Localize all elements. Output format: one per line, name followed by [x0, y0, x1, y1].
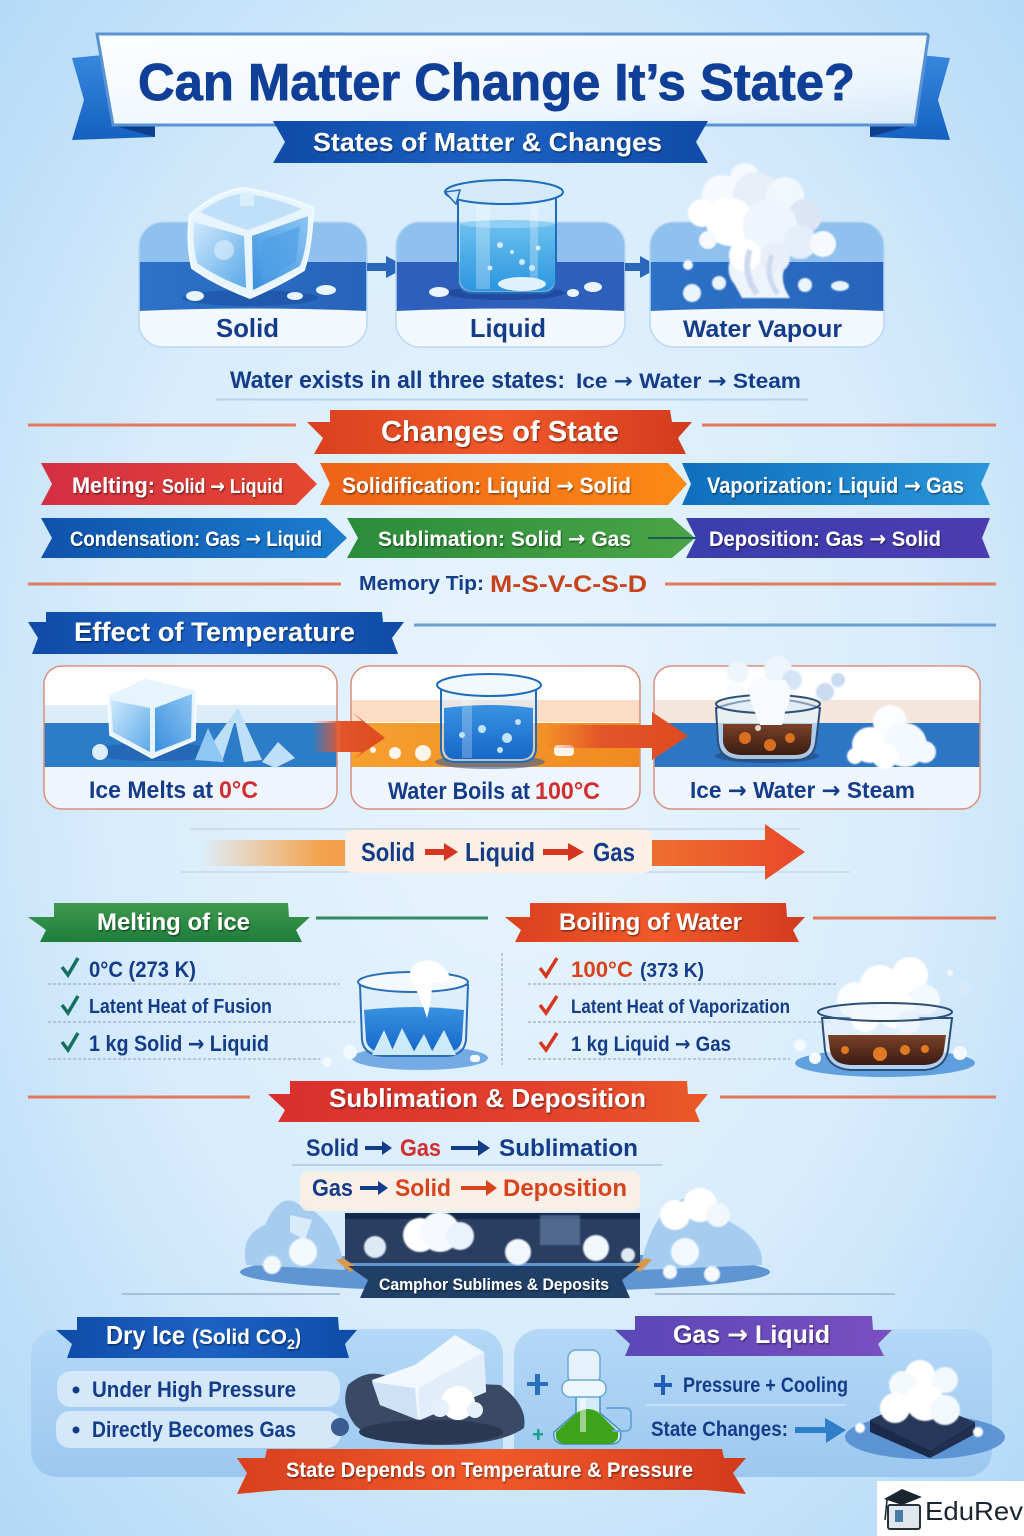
equation: deposition: Solid [395, 1175, 451, 1202]
icon: boiling beaker and steam [715, 656, 936, 769]
icon: beaker [370, 674, 574, 769]
chevron: solidification [320, 463, 687, 505]
heading: dry ice [56, 1317, 357, 1358]
memory tip: Memory Tip: [359, 573, 484, 595]
heading: boiling of water [505, 903, 805, 942]
icon: snow on dark plate [845, 1360, 1005, 1459]
text: water states: Ice → Water → Steam [576, 369, 801, 393]
label: Water Vapour [683, 316, 842, 343]
text: state changes with arrow: State Changes: [651, 1418, 788, 1441]
subtitle ribbon [273, 121, 708, 163]
chevron: solidification: Solidification: Liquid → Solid [342, 473, 631, 499]
panel: solid [139, 188, 367, 347]
heading: dry ice: ) [295, 1326, 301, 1349]
check item: (373 K) [640, 960, 704, 982]
equation: sublimation: Sublimation [499, 1135, 638, 1162]
list: melting of ice [62, 957, 272, 1057]
check item: 1 kg Solid → Liquid [89, 1031, 269, 1057]
panel background [514, 1329, 992, 1477]
icon: ice cube [182, 188, 336, 306]
card background [351, 666, 640, 809]
list: boiling of water [540, 957, 790, 1056]
equation: deposition [300, 1171, 640, 1211]
logo: EduRev [877, 1481, 1024, 1536]
text: pressure and cooling: Pressure + Cooling [683, 1374, 848, 1397]
label: Liquid [470, 313, 546, 343]
icon: beaker [429, 180, 602, 300]
solid liquid gas label: Gas [593, 837, 635, 867]
arrow: water to steam [545, 712, 688, 760]
arrow [625, 256, 660, 278]
label: 0°C [219, 777, 258, 804]
bottom ribbon [237, 1449, 746, 1494]
subtitle text: States of Matter & Changes [313, 127, 662, 157]
chevron: deposition [648, 518, 990, 558]
title text: Can Matter Change It’s State? [138, 54, 855, 112]
heading: effect of temperature [28, 612, 404, 654]
chevron: condensation: Condensation: Gas → Liquid [70, 527, 322, 551]
panel: water boils [351, 666, 640, 809]
chevron: vaporization [682, 463, 990, 505]
panel: ice water steam [654, 656, 980, 809]
chevron: condensation [41, 518, 347, 558]
equation: sublimation: Gas [400, 1135, 441, 1162]
chevron: sublimation: Sublimation: Solid → Gas [378, 527, 631, 551]
chevron: melting [41, 463, 317, 505]
chevron: sublimation [347, 518, 695, 558]
heading: melting of ice [28, 903, 310, 942]
heading: changes of state: Changes of State [381, 416, 619, 448]
card background [654, 666, 980, 809]
label: Water Boils at [388, 778, 530, 805]
solid liquid gas label: Liquid [465, 837, 535, 867]
heading: melting of ice: Melting of ice [97, 909, 250, 936]
heading: sublimation and deposition: Sublimation & Deposition [329, 1083, 646, 1113]
chevron: deposition: Deposition: Gas → Solid [709, 527, 941, 551]
heading: gas to liquid: Gas → Liquid [673, 1320, 830, 1349]
icon: steam cloud [683, 163, 849, 302]
equation: sublimation [306, 1135, 638, 1162]
card outline [650, 222, 884, 347]
card background [139, 222, 367, 347]
pill: directly becomes gas: Directly Becomes Gas [92, 1417, 296, 1442]
heading: effect of temperature: Effect of Temperature [74, 617, 355, 647]
title banner [72, 34, 950, 140]
plus signs [527, 1374, 548, 1440]
pill: directly becomes gas [56, 1411, 341, 1448]
text: water states: Water exists in all three states: [230, 367, 565, 394]
panel: water vapour [650, 163, 884, 347]
panel: liquid [396, 180, 625, 347]
label: Solid [216, 313, 279, 343]
card outline [654, 666, 980, 809]
pill: under high pressure [57, 1371, 340, 1407]
chevron: melting: Solid → Liquid [162, 474, 283, 498]
card background [396, 222, 625, 347]
card outline [351, 666, 640, 809]
solid liquid gas label [345, 830, 652, 873]
text: water states [230, 367, 801, 394]
equation: deposition: Deposition [503, 1175, 627, 1202]
logo: EduRev: EduRev [925, 1496, 1023, 1526]
panel: ice melts [44, 666, 337, 809]
banner panel [97, 34, 928, 125]
card outline [139, 222, 367, 347]
chevrons: changes of state [41, 463, 990, 558]
check item: Latent Heat of Fusion [89, 996, 272, 1018]
icon: graduation cap and tablet [884, 1489, 922, 1529]
icon: melting ice [90, 678, 295, 768]
heading: sublimation and deposition [268, 1081, 708, 1122]
solid liquid gas label: Solid [361, 837, 415, 867]
bottom ribbon: State Depends on Temperature & Pressure [286, 1459, 693, 1482]
chevron: melting: Melting: [72, 473, 155, 498]
cloud puffs [263, 1188, 730, 1282]
equation: deposition: Gas [312, 1175, 353, 1202]
check item: Latent Heat of Vaporization [571, 997, 790, 1018]
label: 100°C [535, 778, 600, 805]
card background [650, 222, 884, 347]
heading: dry ice: (Solid CO [192, 1326, 287, 1349]
illustration: camphor scene: Camphor Sublimes & Deposits [379, 1275, 609, 1294]
dark chamber [345, 1213, 640, 1263]
memory tip [359, 571, 647, 598]
equation: sublimation: Solid [306, 1135, 359, 1162]
arrow [367, 256, 407, 278]
heading: gas to liquid [615, 1316, 892, 1356]
label: Ice Melts at [89, 777, 213, 804]
heading: changes of state [307, 410, 692, 454]
banner tails [72, 50, 950, 140]
check item: 100°C [571, 957, 633, 982]
orange brackets [336, 1258, 358, 1272]
check item [540, 957, 704, 982]
panel: gas to liquid [514, 1329, 1005, 1477]
icon: beaker with melting ice [322, 960, 488, 1070]
heading: dry ice: Dry Ice [106, 1320, 185, 1350]
card background [44, 666, 337, 809]
memory tip: M-S-V-C-S-D [490, 571, 647, 598]
big arrow: heating [200, 824, 805, 880]
panel: dry ice [31, 1329, 503, 1477]
pill: under high pressure: Under High Pressure [92, 1377, 296, 1402]
label: Ice → Water → Steam [690, 777, 915, 804]
background hills and ground [240, 1197, 770, 1292]
icon: dry ice block [331, 1335, 524, 1445]
check item: 0°C (273 K) [89, 957, 196, 982]
card outline [396, 222, 625, 347]
chevron: vaporization: Vaporization: Liquid → Gas [707, 473, 964, 499]
heading: boiling of water: Boiling of Water [559, 909, 742, 936]
arrow: ice to water [312, 712, 385, 760]
camphor label [348, 1266, 640, 1298]
illustration: camphor scene [240, 1188, 770, 1298]
icon: boiling beaker [794, 957, 975, 1077]
panel background [31, 1329, 503, 1477]
heading: dry ice: 2 [287, 1336, 295, 1352]
card outline [44, 666, 337, 809]
check item: 1 kg Liquid → Gas [571, 1032, 731, 1056]
icon: flask [554, 1350, 631, 1444]
